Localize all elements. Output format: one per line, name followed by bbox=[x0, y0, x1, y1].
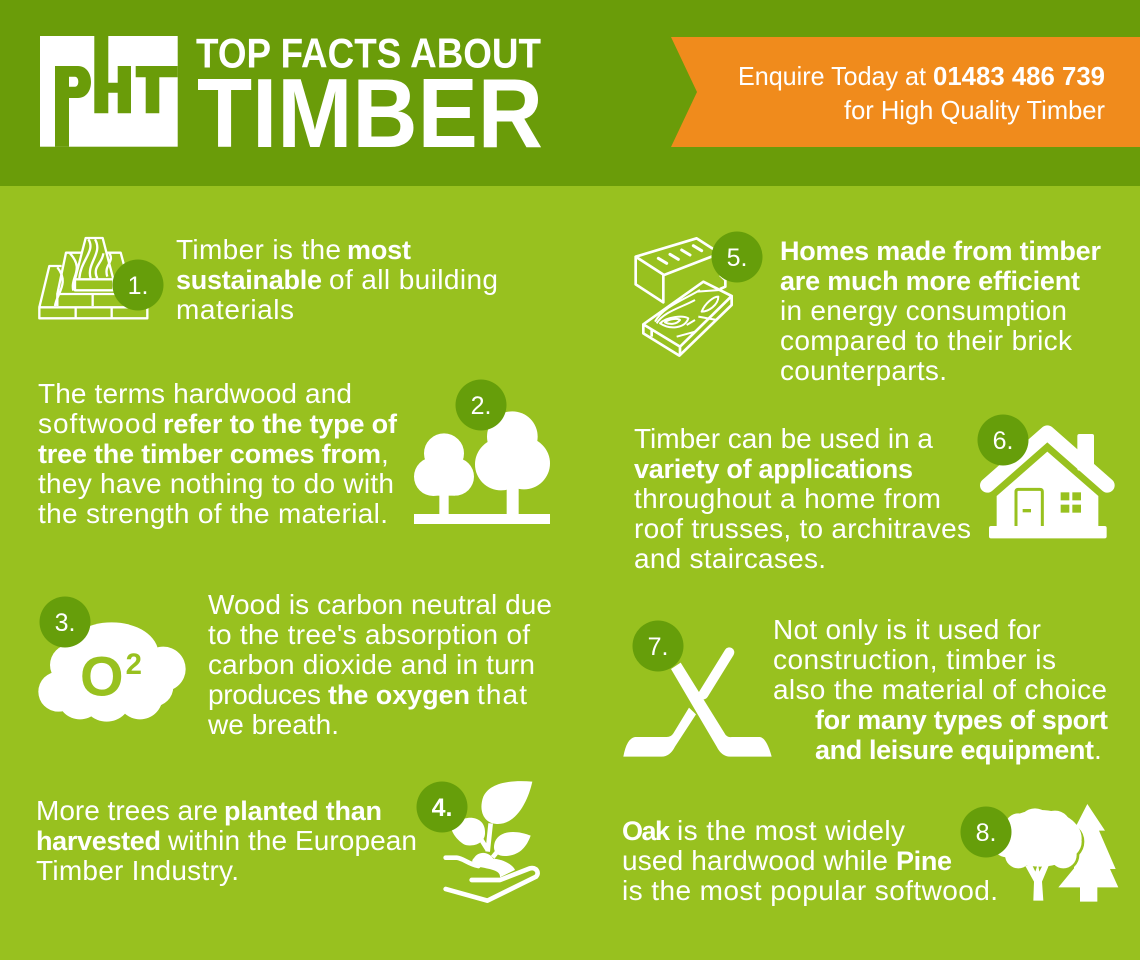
text 3: that bbox=[477, 679, 527, 710]
enquiry banner: for High Quality Timber bbox=[844, 95, 1105, 125]
text 5: in energy consumption bbox=[780, 295, 1067, 326]
icon: crossed hockey sticks bbox=[623, 652, 772, 757]
text 8: used hardwood while bbox=[622, 845, 888, 876]
text 7: and leisure equipment bbox=[815, 735, 1094, 765]
fact 2 bbox=[38, 378, 550, 529]
text 7: also the material of choice bbox=[773, 674, 1107, 705]
number badge 7: 7. bbox=[648, 633, 668, 661]
text 8: Pine bbox=[896, 846, 952, 876]
icon: oxygen cloud: O bbox=[80, 645, 124, 708]
number badge 6 bbox=[978, 414, 1028, 466]
number badge 3 bbox=[40, 596, 90, 648]
text 4: More trees are bbox=[36, 795, 218, 826]
icon: oxygen cloud bbox=[38, 622, 186, 722]
number badge 4: 4. bbox=[432, 794, 452, 822]
text 3: produces bbox=[208, 679, 321, 710]
text 7: . bbox=[1094, 734, 1102, 765]
enquiry banner bbox=[671, 37, 1140, 147]
icon: timber and bricks bbox=[39, 238, 147, 318]
text 5 bbox=[780, 236, 1101, 386]
text 3: to the tree's absorption of bbox=[208, 619, 530, 650]
fact 6 bbox=[634, 414, 1107, 574]
text 6: throughout a home from bbox=[634, 483, 941, 514]
text 5: compared to their brick bbox=[780, 325, 1073, 356]
text 3: carbon dioxide and in turn bbox=[208, 649, 535, 680]
number badge 8: 8. bbox=[976, 819, 996, 847]
icon: hand holding seedling bbox=[446, 781, 538, 901]
text 6 bbox=[634, 423, 971, 574]
text 1: sustainable bbox=[176, 265, 322, 295]
icon: oak and pine bbox=[993, 804, 1118, 902]
number badge 3: 3. bbox=[55, 609, 75, 637]
text 5: counterparts. bbox=[780, 355, 947, 386]
text 7: Not only is it used for bbox=[773, 614, 1041, 645]
enquiry banner: Enquire Today at bbox=[738, 61, 927, 91]
number badge 2: 2. bbox=[471, 392, 491, 420]
text 2: the strength of the material. bbox=[38, 498, 388, 529]
number badge 6: 6. bbox=[993, 427, 1013, 455]
text 3: the oxygen bbox=[328, 680, 470, 710]
text 2: The terms hardwood and bbox=[38, 378, 352, 409]
text 2 bbox=[38, 378, 398, 529]
text 2: they have nothing to do with bbox=[38, 468, 394, 499]
text 6: and staircases. bbox=[634, 543, 826, 574]
text 1 bbox=[176, 234, 498, 325]
title: TIMBER bbox=[197, 58, 543, 168]
text 3: Wood is carbon neutral due bbox=[208, 589, 552, 620]
text 1: of all building bbox=[329, 264, 498, 295]
number badge 5: 5. bbox=[727, 244, 747, 272]
icon: brick and timber plank bbox=[636, 238, 732, 356]
text 3 bbox=[207, 589, 552, 740]
fact 1 bbox=[39, 234, 498, 325]
icon: house bbox=[987, 433, 1107, 538]
number badge 5 bbox=[712, 232, 762, 282]
text 6: roof trusses, to architraves bbox=[634, 513, 971, 544]
text 8: is the most popular softwood. bbox=[622, 875, 998, 906]
logo: PHT bbox=[40, 36, 178, 147]
text 4: planted than bbox=[224, 796, 382, 826]
text 6: variety of applications bbox=[634, 454, 913, 484]
text 4 bbox=[36, 795, 417, 886]
icon: oxygen cloud: 2 bbox=[126, 648, 142, 681]
text 2: tree the timber comes from bbox=[38, 439, 381, 469]
number badge 8 bbox=[960, 806, 1012, 858]
title: TOP FACTS ABOUT bbox=[196, 30, 541, 76]
text 5: are much more efficient bbox=[780, 266, 1080, 296]
text 1: most bbox=[347, 235, 411, 265]
number badge 2 bbox=[456, 380, 506, 430]
text 4: harvested bbox=[36, 826, 161, 856]
number badge 4 bbox=[416, 782, 468, 832]
fact 4 bbox=[36, 781, 538, 901]
text 7 bbox=[773, 614, 1108, 765]
text 6: Timber can be used in a bbox=[634, 423, 933, 454]
text 5: Homes made from timber bbox=[780, 236, 1101, 266]
text 8 bbox=[622, 815, 998, 906]
text 4: Timber Industry. bbox=[36, 855, 239, 886]
number badge 1 bbox=[112, 260, 164, 310]
fact 3 bbox=[38, 589, 552, 740]
text 8: Oak bbox=[622, 816, 671, 846]
number badge 1: 1. bbox=[128, 272, 148, 300]
text 2: refer to the type of bbox=[163, 409, 398, 439]
text 7: for many types of sport bbox=[815, 705, 1108, 735]
fact 8 bbox=[622, 804, 1118, 906]
header band bbox=[0, 0, 1140, 186]
text 2: softwood bbox=[38, 408, 157, 439]
text 4: within the European bbox=[167, 825, 417, 856]
text 2: , bbox=[381, 438, 389, 469]
text 3: we breath. bbox=[207, 709, 339, 740]
number badge 7 bbox=[632, 620, 684, 672]
fact 5 bbox=[636, 232, 1101, 386]
text 1: materials bbox=[176, 294, 294, 325]
text 8: is the most widely bbox=[677, 815, 905, 846]
icon: two trees bbox=[414, 411, 550, 524]
enquiry banner: 01483 486 739 bbox=[933, 61, 1105, 91]
fact 7 bbox=[623, 614, 1108, 765]
text 7: construction, timber is bbox=[773, 644, 1056, 675]
text 1: Timber is the bbox=[176, 234, 341, 265]
